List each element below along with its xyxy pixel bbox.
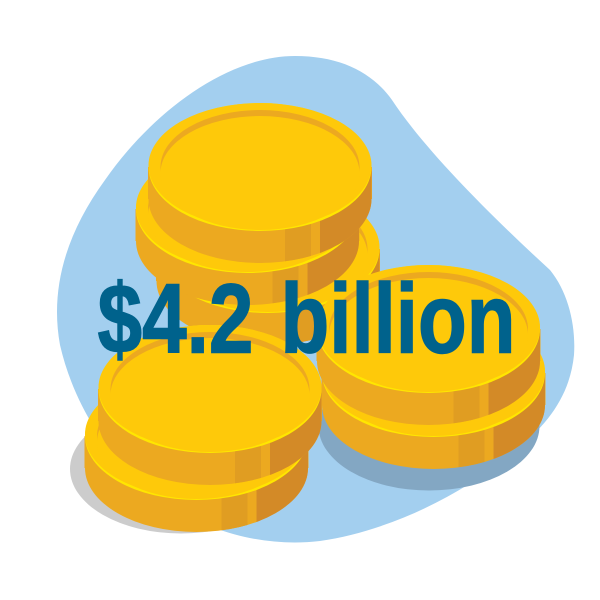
coin stack: left xyxy=(84,325,322,536)
background blob xyxy=(57,56,574,542)
shadow: left stack xyxy=(70,404,292,534)
infographic xyxy=(57,56,574,542)
headline amount: $4.2 xyxy=(98,264,254,374)
headline amount xyxy=(98,264,516,374)
coin stack: back xyxy=(136,103,380,349)
coin stack: right xyxy=(316,265,546,473)
shadow: right stack xyxy=(318,362,540,490)
headline amount: billion xyxy=(280,264,516,374)
